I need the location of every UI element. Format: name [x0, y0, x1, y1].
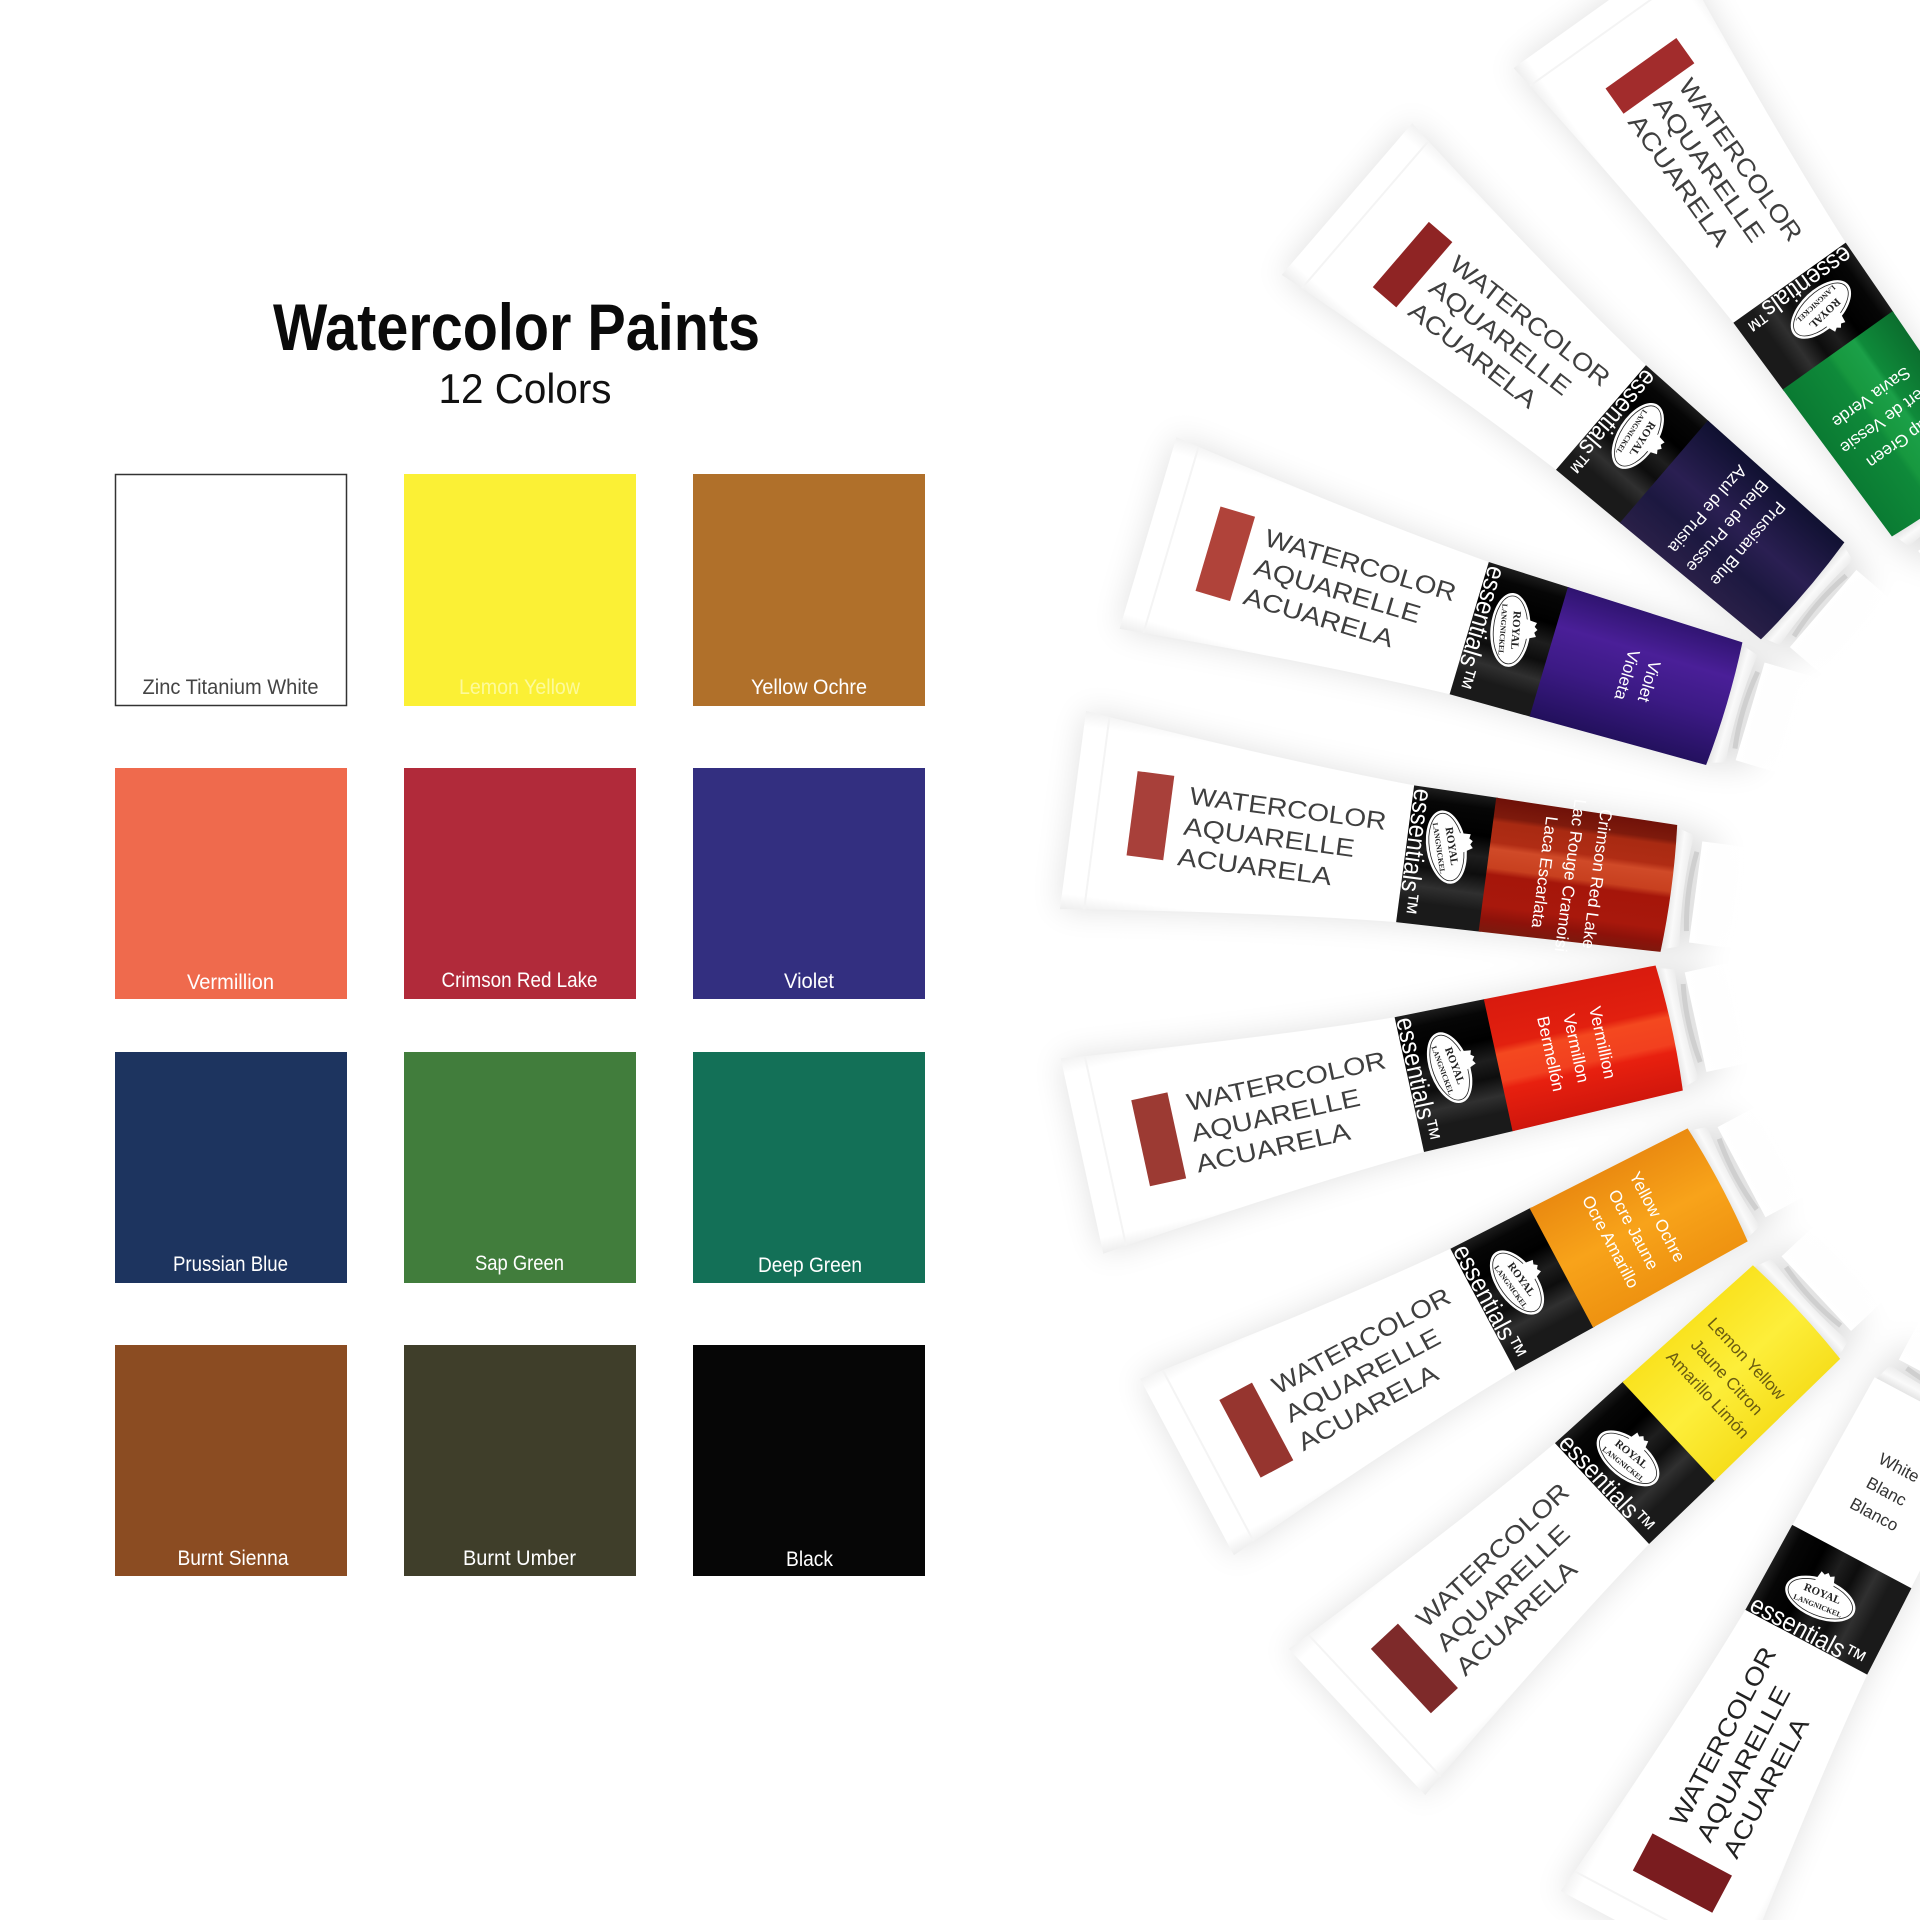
tube: Yellow Ochre: Ocre Jaune	[1604, 1186, 1662, 1273]
tube: Yellow Ochre: ROYAL	[1505, 1260, 1537, 1299]
tube: Lemon Yellow: Amarillo Limón	[1662, 1347, 1753, 1443]
swatch: Deep Green	[693, 1052, 925, 1283]
swatch: Zinc Titanium White	[116, 474, 346, 706]
tube: Lemon Yellow: essentials™	[1553, 1428, 1662, 1541]
swatch: Vermillion	[115, 768, 347, 999]
tube: Violet	[1120, 437, 1755, 800]
tube: Crimson Red Lake: ROYAL	[1443, 826, 1460, 866]
tube: Violet: WATERCOLOR	[1262, 524, 1459, 607]
swatch: Lemon Yellow	[404, 474, 636, 706]
tube: Yellow Ochre: LANGNICKEL	[1492, 1264, 1530, 1310]
tube: White: ACUARELA	[1717, 1713, 1815, 1863]
tube: Yellow Ochre: Yellow Ochre	[1625, 1169, 1689, 1265]
soft shadows under all tubes	[1060, 0, 1920, 1920]
tube: Violet: AQUARELLE	[1251, 553, 1424, 629]
tube: Lemon Yellow: ACUARELA	[1450, 1555, 1583, 1681]
tube: Crimson Red Lake: WATERCOLOR	[1188, 782, 1388, 836]
tube: White: Blanc	[1863, 1473, 1910, 1510]
tube: Prussian Blue: ROYAL	[1627, 419, 1658, 458]
tube: Prussian Blue: WATERCOLOR	[1444, 250, 1615, 392]
tube: Prussian Blue: LANGNICKEL	[1614, 408, 1649, 456]
tube: Lemon Yellow: Lemon Yellow	[1704, 1314, 1790, 1404]
tube: Sap Green: WATERCOLOR	[1673, 73, 1808, 247]
tube: Lemon Yellow: AQUARELLE	[1431, 1520, 1576, 1657]
tube: Vermillion: ROYAL	[1442, 1046, 1467, 1086]
tube: Vermillion: LANGNICKEL	[1429, 1045, 1456, 1096]
tube: Prussian Blue: Prussian Blue	[1706, 498, 1789, 590]
tube: Violet: Violeta	[1610, 647, 1643, 703]
swatch: Prussian Blue: Prussian Blue	[173, 1253, 288, 1276]
tube: White: LANGNICKEL	[1792, 1592, 1843, 1619]
tube: White: ROYAL	[1802, 1581, 1842, 1607]
tube: Lemon Yellow: Jaune Citron	[1687, 1336, 1767, 1419]
tube: Sap Green: ROYAL	[1806, 295, 1843, 331]
tube: Violet: ACUARELA	[1240, 582, 1397, 653]
swatch: Prussian Blue	[115, 1052, 347, 1283]
swatch: Burnt Umber	[404, 1345, 636, 1576]
swatch: Sap Green	[404, 1052, 636, 1283]
swatch: Zinc Titanium White: Zinc Titanium White	[142, 676, 318, 699]
tube: Lemon Yellow: WATERCOLOR	[1411, 1478, 1575, 1633]
tube: Yellow Ochre: Ocre Amarillo	[1578, 1192, 1643, 1291]
swatch: Black	[693, 1345, 925, 1576]
tube: Violet: essentials™	[1447, 563, 1512, 693]
tube: Yellow Ochre: ACUARELA	[1293, 1359, 1443, 1457]
subtitle: 12 Colors	[438, 365, 612, 412]
tube: Crimson Red Lake	[1060, 711, 1684, 988]
swatch: Burnt Sienna: Burnt Sienna	[178, 1547, 289, 1570]
tube: Vermillion: essentials™	[1390, 1014, 1447, 1145]
title: Watercolor Paints	[273, 290, 760, 364]
swatch: Crimson Red Lake: Crimson Red Lake	[442, 969, 598, 992]
tube: Sap Green: essentials™	[1737, 240, 1858, 338]
swatch: Lemon Yellow: Lemon Yellow	[459, 676, 581, 699]
tube: Sap Green: Savia Verde	[1828, 363, 1914, 431]
tube: Prussian Blue	[1282, 123, 1870, 668]
tube: Crimson Red Lake: essentials™	[1392, 787, 1439, 917]
tube: Prussian Blue: ACUARELA	[1403, 297, 1543, 414]
tube: White: Blanco	[1847, 1494, 1902, 1535]
tube: Vermillion: Vermillion	[1585, 1005, 1619, 1081]
swatch: Yellow Ochre	[693, 474, 925, 706]
swatch: Yellow Ochre: Yellow Ochre	[751, 676, 867, 699]
tube: Vermillion: Vermillon	[1559, 1012, 1593, 1084]
swatch: Crimson Red Lake	[404, 768, 636, 999]
tube necks and caps	[1655, 462, 1920, 1437]
tube: Sap Green: ACUARELA	[1622, 109, 1735, 252]
tube: Violet: LANGNICKEL	[1496, 603, 1509, 655]
tube: Vermillion	[1061, 930, 1693, 1254]
tube: Vermillion: Bermellón	[1533, 1014, 1568, 1093]
swatch: Violet: Violet	[784, 970, 834, 993]
tube: Yellow Ochre: WATERCOLOR	[1267, 1283, 1455, 1400]
swatch: Sap Green: Sap Green	[475, 1252, 564, 1275]
swatch: Burnt Sienna	[115, 1345, 347, 1576]
tube: White	[1561, 1360, 1920, 1920]
tube: Yellow Ochre	[1140, 1095, 1767, 1555]
tube: Sap Green	[1514, 0, 1920, 559]
tube: White: essentials™	[1745, 1589, 1871, 1675]
tube: Lemon Yellow: LANGNICKEL	[1601, 1445, 1646, 1484]
tube: Yellow Ochre: AQUARELLE	[1280, 1323, 1445, 1429]
swatch: Deep Green: Deep Green	[758, 1254, 862, 1277]
tube: Crimson Red Lake: LANGNICKEL	[1431, 822, 1447, 874]
tube: Sap Green: AQUARELLE	[1647, 91, 1770, 248]
swatch: Vermillion: Vermillion	[187, 971, 274, 994]
tube: Sap Green: LANGNICKEL	[1794, 283, 1837, 325]
tube: Crimson Red Lake: Crimson Red Lake	[1578, 808, 1616, 950]
tube: Vermillion: WATERCOLOR	[1184, 1046, 1389, 1117]
tube: Lemon Yellow: ROYAL	[1612, 1438, 1650, 1471]
tube: Crimson Red Lake: AQUARELLE	[1182, 813, 1356, 863]
swatch: Black: Black	[786, 1548, 833, 1571]
tube: White: WATERCOLOR	[1665, 1642, 1782, 1830]
tube: Prussian Blue: AQUARELLE	[1424, 273, 1576, 401]
tube: Vermillion: AQUARELLE	[1189, 1084, 1363, 1148]
tube: Prussian Blue: Bleu de Prusse	[1682, 476, 1772, 576]
swatch: Violet	[693, 768, 925, 999]
tube: Crimson Red Lake: ACUARELA	[1176, 843, 1334, 891]
swatch: Burnt Umber: Burnt Umber	[463, 1547, 576, 1570]
tube: Prussian Blue: Azul de Prusia	[1664, 461, 1750, 557]
tube: Lemon Yellow	[1289, 1237, 1867, 1795]
tube: Crimson Red Lake: Lac Rouge Cramoisi	[1551, 798, 1590, 953]
tube: Violet: Violet	[1634, 658, 1664, 705]
tube: Crimson Red Lake: Laca Escarlata	[1528, 815, 1561, 930]
tube: White: AQUARELLE	[1691, 1682, 1796, 1847]
tube: Yellow Ochre: essentials™	[1447, 1239, 1533, 1365]
tube: Vermillion: ACUARELA	[1194, 1118, 1353, 1178]
tube: Violet: ROYAL	[1508, 611, 1523, 650]
tube: Prussian Blue: essentials™	[1558, 364, 1663, 480]
